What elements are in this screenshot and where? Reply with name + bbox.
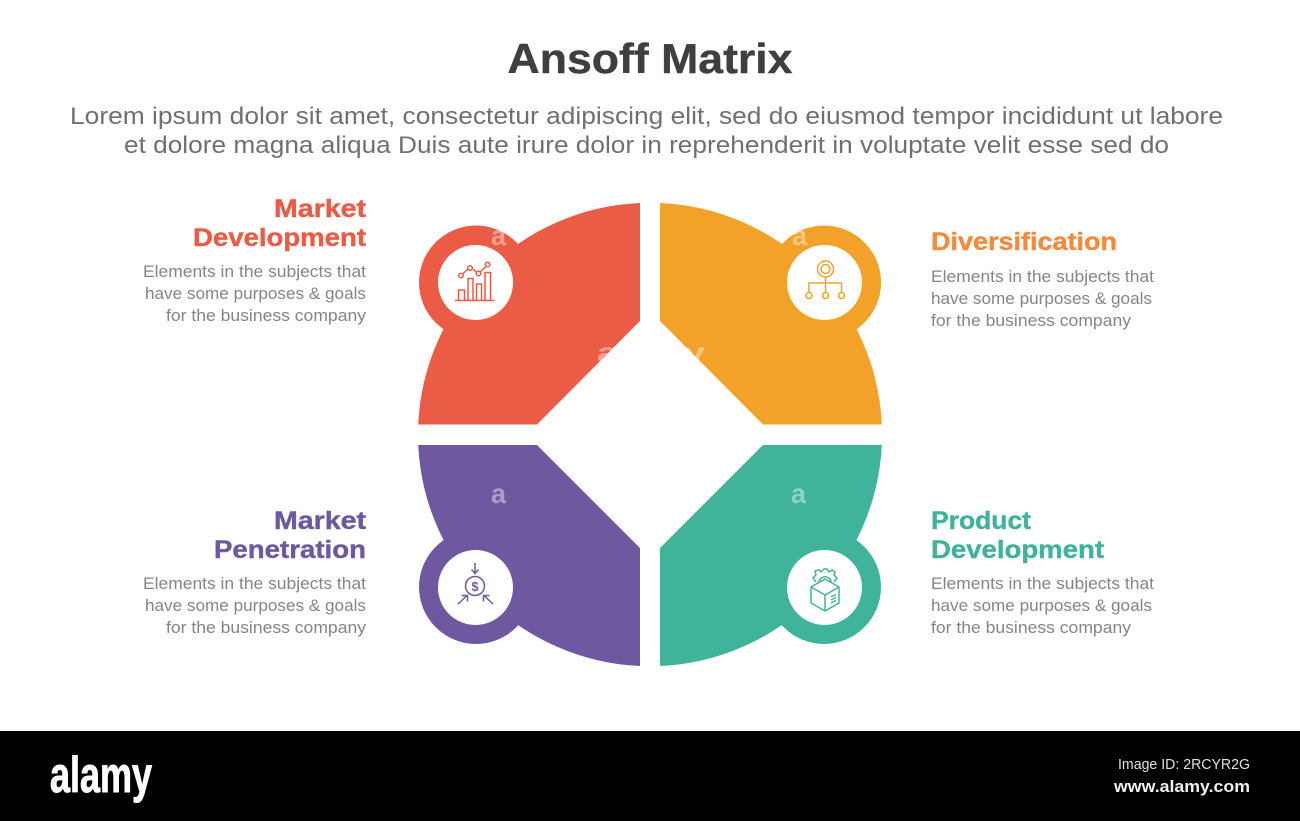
icon: dollar with arrows (458, 563, 493, 604)
icon: gear and box (811, 569, 839, 611)
panel: market development quadrant (418, 203, 640, 424)
text block: market penetration: Elements in the subjects that (143, 574, 366, 593)
text block: diversification: Diversification (931, 228, 1117, 256)
panel: diversification quadrant (660, 203, 882, 424)
title: Ansoff Matrix (508, 35, 793, 82)
text block: diversification: for the business company (931, 311, 1132, 330)
text block: market penetration: Penetration (214, 536, 366, 564)
text block: product development: Development (931, 536, 1105, 564)
intro paragraph: et dolore magna aliqua Duis aute irure dolor in reprehenderit in voluptate velit esse sed do (124, 132, 1169, 159)
watermark fragments: alamy (597, 337, 706, 368)
icon: hierarchy (806, 261, 844, 298)
watermark fragments (491, 220, 807, 509)
panel: product development quadrant (660, 445, 882, 666)
text block: product development: for the business company (931, 618, 1132, 637)
text block: product development (931, 507, 1154, 637)
footer url: www.alamy.com (1113, 777, 1250, 796)
text block: diversification: have some purposes & goals (931, 289, 1152, 308)
text block: market development: Elements in the subjects that (143, 262, 366, 281)
text block: diversification: Elements in the subjects that (931, 267, 1154, 286)
text block: product development: Product (931, 507, 1032, 535)
footer logo: alamy (50, 747, 152, 803)
icon: dollar with arrows: $ (471, 579, 479, 594)
text block: product development: Elements in the subjects that (931, 574, 1154, 593)
text block: market penetration (143, 507, 367, 637)
text block: market development (143, 195, 367, 325)
text block: market penetration: have some purposes & goals (145, 596, 366, 615)
text block: market development: have some purposes & goals (145, 284, 366, 303)
text block: market development: Development (193, 224, 367, 252)
intro paragraph: Lorem ipsum dolor sit amet, consectetur adipiscing elit, sed do eiusmod tempor incididunt ut labore (70, 103, 1223, 130)
intro paragraph (70, 103, 1223, 159)
text block: diversification (931, 228, 1154, 330)
watermark fragments: a (491, 220, 506, 251)
text block: market development: Market (274, 195, 367, 223)
icon: bar chart with trend line (455, 262, 494, 300)
text block: market development: for the business company (166, 306, 367, 325)
text block: market penetration: Market (274, 507, 367, 535)
footer bar (0, 731, 1300, 821)
text block: market penetration: for the business company (166, 618, 367, 637)
footer image id: Image ID: 2RCYR2G (1118, 756, 1250, 773)
watermark fragments: a (491, 478, 506, 509)
text block: product development: have some purposes & goals (931, 596, 1152, 615)
panel: market penetration quadrant (418, 445, 640, 666)
watermark fragments: a (792, 220, 807, 251)
watermark fragments: a (791, 478, 806, 509)
